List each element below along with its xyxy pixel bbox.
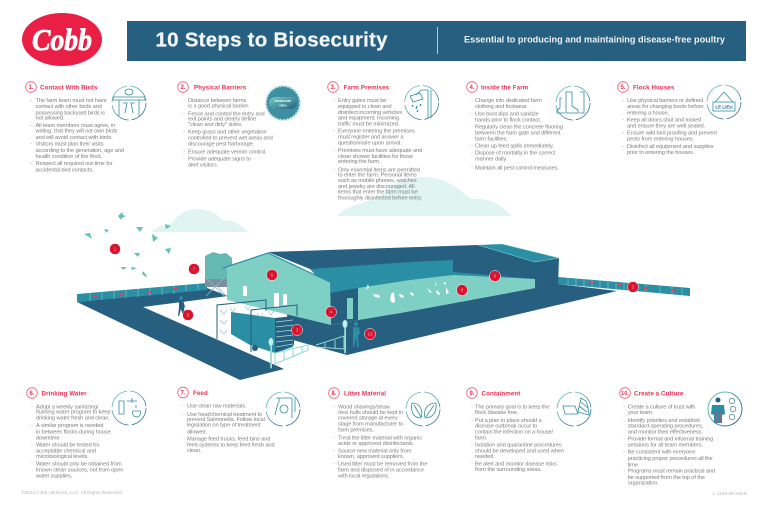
text 5: entering a house. <box>627 110 669 116</box>
text 4: Dispose of mortality in the correct <box>475 151 556 157</box>
heading 9: 9. <box>469 391 475 397</box>
text 10: be supported from the top of the <box>628 475 705 481</box>
text 7: Use heat/chemical treatment to <box>187 412 262 418</box>
text 1: - <box>30 161 32 167</box>
text 9: needed. <box>475 454 495 460</box>
text 4: between the farm gate and different <box>475 131 561 137</box>
heading 4: Inside the Farm <box>481 84 529 91</box>
text 7: allowed. <box>187 430 207 436</box>
panel: 2 physical barriers <box>178 82 300 168</box>
left perimeter fence <box>77 283 207 302</box>
icon: leaves <box>406 392 440 426</box>
text 10: - <box>623 418 625 424</box>
text 4: - <box>471 111 473 117</box>
icon: person with checklist <box>708 392 742 426</box>
text 10: your team. <box>628 410 654 416</box>
icon: biosecurity area sign <box>266 86 300 120</box>
text 1: accidental bird contacts. <box>36 167 94 173</box>
text 5: pests from entering houses. <box>627 137 694 143</box>
icon: person with arms out <box>112 86 146 120</box>
heading 9: Containment <box>482 390 520 397</box>
text 8: farm premises. <box>338 427 374 433</box>
text 1: - <box>30 142 32 148</box>
text 3: to enter the farm. Personal items <box>338 172 417 178</box>
text 10 <box>623 404 715 487</box>
text 1: health condition of the flock. <box>36 154 103 160</box>
copyright footer: ©2024 Cobb-Vantress, LLC. All Rights Reserved <box>21 489 122 495</box>
text 9: flock disease free. <box>475 410 519 416</box>
text 4: hands prior to flock contact. <box>475 117 542 123</box>
text 8: - <box>333 448 335 454</box>
heading 10 <box>620 388 684 398</box>
heading 2 <box>178 82 247 92</box>
text 9: The primary goal is to keep the <box>475 404 549 410</box>
text 1: Visitors must plan their visits <box>36 142 104 148</box>
text 1: - <box>30 98 32 104</box>
text 9: - <box>471 404 473 410</box>
feed truck and disinfecting gantries <box>217 300 297 353</box>
icon: biosecurity area sign: BIOSECURE <box>275 99 291 103</box>
numbered red markers: 1 <box>114 247 117 252</box>
text 3: entering the farm. <box>338 159 381 165</box>
icon: feed system <box>266 392 300 426</box>
text 2: - <box>183 149 185 155</box>
text 8: stage from manufacturer to <box>338 422 403 428</box>
text 10: standard operating procedures, <box>628 423 704 429</box>
numbered red markers: 8 <box>461 288 464 293</box>
flock of wild birds <box>84 212 171 277</box>
text 1 <box>30 98 124 173</box>
text 3: clean shower facilities for those <box>338 154 413 160</box>
text 1: - <box>30 123 32 129</box>
text 3 <box>333 98 423 202</box>
text 10: practicing proper procedures all the <box>628 456 713 462</box>
text 2: is a good physical barrier. <box>188 103 250 109</box>
heading 7: 7. <box>180 390 186 396</box>
text 4: farm facilities. <box>475 137 508 143</box>
text 2: Distance between farms <box>188 98 247 104</box>
gates <box>275 336 344 364</box>
text 9: should be developed and used when <box>475 449 564 455</box>
numbered red markers: 7 <box>193 267 196 272</box>
text 6 <box>31 404 123 479</box>
text 10: organization. <box>628 481 659 487</box>
heading 9 <box>467 388 520 398</box>
icon: hanging sign: LE LIEU <box>715 105 733 110</box>
text 6: microbiological levels. <box>36 454 89 460</box>
heading 4: 4. <box>469 85 475 91</box>
text 4: Change into dedicated farm <box>475 98 542 104</box>
text 6: A similar program is needed <box>36 423 103 429</box>
text 4: Maintain all pest control measures. <box>475 165 559 171</box>
text 6: - <box>31 404 33 410</box>
logo: Cobb: Cobb <box>32 22 92 57</box>
text 3: Entry gates must be <box>338 98 386 104</box>
text 10: - <box>623 404 625 410</box>
text 1: according to the generation, age and <box>36 148 124 154</box>
heading 2: 2. <box>180 85 186 91</box>
text 9: contain the infection on a house/ <box>475 430 553 436</box>
text 8: - <box>333 461 335 467</box>
text 5: areas for changing boots before <box>627 104 704 110</box>
text 3: questionnaire upon arrival. <box>338 141 402 147</box>
illustration: farm scene <box>77 177 690 380</box>
text 5: - <box>622 130 624 136</box>
text 7: - <box>183 404 185 410</box>
text 9: from the surrounding areas. <box>475 467 542 473</box>
text 5: - <box>622 144 624 150</box>
numbered red markers: 2 <box>632 285 635 290</box>
icon: shower <box>405 86 439 120</box>
text 9: disease outbreak occur to <box>475 424 537 430</box>
text 10: and monitor their effectiveness. <box>628 430 703 436</box>
text 8: Used litter must be removed from the <box>338 461 427 467</box>
text 8: known, approved suppliers. <box>338 454 405 460</box>
panel: 6 drinking water <box>27 388 146 479</box>
text 3: - <box>333 167 335 173</box>
text 4: Clean up feed spills immediately. <box>475 144 554 150</box>
text 3: - <box>333 98 335 104</box>
text 3: and equipment. Incoming <box>338 116 399 122</box>
right perimeter fence <box>558 277 690 296</box>
text 8 <box>333 404 427 479</box>
text 10: - <box>623 469 625 475</box>
text 10: Create a culture of trust with <box>628 404 695 410</box>
panel: 10 create a culture <box>620 388 742 487</box>
text 6: - <box>31 461 33 467</box>
heading 10: 10. <box>621 391 629 397</box>
text 8: Wood shavings/straw <box>338 404 391 410</box>
icon: hand and plan <box>557 392 591 426</box>
title: 10 Steps to Biosecurity <box>156 29 388 52</box>
text 6: Adopt a weekly sanitizing/ <box>36 404 99 410</box>
heading 6 <box>27 388 87 398</box>
text 2: - <box>183 111 185 117</box>
text 8: acids or approved disinfectants. <box>338 441 415 447</box>
text 10: - <box>623 450 625 456</box>
worker in yard <box>178 296 185 316</box>
heading 3: 3. <box>330 85 336 91</box>
dark floor and right road <box>285 284 617 355</box>
text 2: Keep grass and other vegetation <box>188 130 266 136</box>
text 3: - <box>333 128 335 134</box>
heading 5: Flock Houses <box>633 84 675 91</box>
heading 8: Litter Material <box>344 390 386 397</box>
heading 7 <box>178 387 208 398</box>
heading 7: Feed <box>193 390 208 397</box>
text 1: and will avoid contact with birds. <box>36 135 113 141</box>
text 7: Use clean raw materials. <box>187 404 247 410</box>
text 2: Provide adequate signs to <box>188 156 251 162</box>
text 2: discourage pest harborage. <box>188 142 255 148</box>
numbered red markers: 6 <box>494 274 497 279</box>
text 10: Programs must remain practical and <box>628 469 715 475</box>
text 6: - <box>31 442 33 448</box>
text 9: farm. <box>475 435 488 441</box>
text 3: items that enter the farm must be <box>338 190 418 196</box>
heading 1: 1. <box>28 85 34 91</box>
panel: 1 contact with birds <box>26 82 146 173</box>
text 2: alert visitors. <box>188 162 219 168</box>
text 2: "clean and dirty" sides. <box>188 122 243 128</box>
heading 8 <box>329 388 386 398</box>
text 6: water supplies. <box>35 473 73 479</box>
left road and yard <box>77 288 284 380</box>
text 8: farm and disposed of in accordance <box>338 467 424 473</box>
text 3: traffic must be minimized. <box>338 122 400 128</box>
document code: L-1125-09-24EN <box>713 491 747 496</box>
heading 1: Contact With Birds <box>40 84 98 91</box>
feed silos <box>205 252 232 296</box>
heading 3: Farm Premises <box>344 84 390 91</box>
text 3: Everyone entering the premises <box>338 128 415 134</box>
numbered red markers: 10 <box>367 332 373 337</box>
text 3: Premises must have adequate and <box>338 148 422 154</box>
numbered red markers <box>110 244 638 340</box>
text 5: prior to entering the houses. <box>627 150 695 156</box>
text 3: and jewelry are discouraged. All <box>338 184 414 190</box>
text 4: clothing and footwear. <box>475 104 528 110</box>
text 3: disinfect incoming vehicles <box>338 110 402 116</box>
text 2: exit points and clearly define <box>188 117 256 123</box>
icon: biosecurity area sign: AREA <box>279 104 287 108</box>
text 3: such as mobile phones, watches <box>338 178 417 184</box>
heading 5 <box>618 82 675 92</box>
text 7: - <box>183 412 185 418</box>
subtitle: Essential to producing and maintaining disease-free poultry <box>464 34 726 46</box>
text 2: controlled to prevent wet areas and <box>188 136 273 142</box>
text 5: Ensure wild bird proofing and prevent <box>627 130 717 136</box>
clouds <box>151 177 511 232</box>
numbered red markers: 3 <box>296 328 299 333</box>
text 6: Water should only be obtained from <box>36 461 122 467</box>
text 6: flushing water program to keep <box>36 410 110 416</box>
text 9: - <box>471 461 473 467</box>
text 9: Put a plan in place should a <box>475 418 542 424</box>
text 7 <box>183 404 274 454</box>
text 4: manner daily. <box>475 157 508 163</box>
text 1: contact with other birds and <box>36 104 102 110</box>
text 1: Respect all required out-time for <box>36 161 113 167</box>
text 8: with local regulations. <box>337 473 390 479</box>
text 5 <box>622 98 717 156</box>
text 3: - <box>333 148 335 154</box>
text 5: Keep all doors shut and locked <box>627 117 701 123</box>
text 9: - <box>471 418 473 424</box>
text 7: feed systems to keep feed fresh and <box>187 442 274 448</box>
text 1: possessing backyard birds is <box>36 110 105 116</box>
text 7: prevent Salmonella. Follow local <box>187 417 265 423</box>
text 4: Use boot dips and sanitize <box>475 111 539 117</box>
text 9 <box>471 404 564 473</box>
text 10: Identify priorities and establish <box>628 418 700 424</box>
panel: 4 inside the farm <box>467 82 590 171</box>
sign posts <box>269 320 347 368</box>
text 4: Regularly clean the concrete flooring <box>475 125 563 131</box>
chicken house <box>223 244 559 325</box>
heading 8: 8. <box>331 391 337 397</box>
text 4 <box>471 98 563 171</box>
heading 1 <box>26 82 98 92</box>
text 2: Ensure adequate vermin control. <box>188 149 267 155</box>
logo: Cobb <box>22 13 102 66</box>
panel: 3 farm premises <box>328 82 439 202</box>
text 5: and ensure they are well sealed. <box>627 124 706 130</box>
text 4: - <box>471 151 473 157</box>
panel: 9 containment <box>467 388 591 473</box>
panel: 7 feed <box>178 387 300 454</box>
text 1: not allowed. <box>36 116 65 122</box>
text 3: equipped to clean and <box>338 104 391 110</box>
heading 2: Physical Barriers <box>194 84 247 91</box>
text 4: - <box>471 125 473 131</box>
text 2: - <box>183 156 185 162</box>
text 10: sessions for all team members. <box>628 442 703 448</box>
icon: water tap and bottle <box>112 391 146 425</box>
text 9: Be alert and monitor disease risks <box>475 461 557 467</box>
text 10: time. <box>628 462 640 468</box>
icon: boots <box>556 86 590 120</box>
text 2: Fence and control the entry and <box>188 111 265 117</box>
header banner <box>127 21 746 61</box>
text 4: - <box>471 165 473 171</box>
text 8: /rice hulls should be kept in <box>338 410 403 416</box>
text 9: - <box>471 443 473 449</box>
text 6: drinking water fresh and clean. <box>36 416 110 422</box>
text 6: acceptable chemical and <box>36 449 96 455</box>
numbered red markers: 4 <box>330 310 333 315</box>
numbered red markers: 9 <box>187 313 190 318</box>
text 5: - <box>622 98 624 104</box>
heading 4 <box>467 82 529 92</box>
text 10: - <box>623 436 625 442</box>
text 10: Provide formal and informal training <box>628 436 713 442</box>
text 7: clean. <box>187 448 202 454</box>
text 5: Use physical barriers or defined <box>627 98 703 104</box>
text 9: Isolation and quarantine procedures <box>475 443 562 449</box>
text 8: covered storage at every <box>338 416 398 422</box>
text 10: Be consistent with everyone <box>628 450 695 456</box>
heading 6: 6. <box>29 391 35 397</box>
text 8: - <box>333 435 335 441</box>
text 5: Disinfect all equipment and supplies <box>627 144 714 150</box>
text 6: in between flocks during house <box>36 430 110 436</box>
heading 3 <box>328 82 390 92</box>
text 7: legislation on type of treatment <box>187 422 261 428</box>
text 8: Source new material only from <box>338 448 412 454</box>
text 4: - <box>471 98 473 104</box>
heading 6: Drinking Water <box>42 390 87 397</box>
text 6: downtime. <box>36 436 61 442</box>
text 3: Only essential items are permitted <box>338 167 420 173</box>
text 3: thoroughly disinfected before entry. <box>338 196 423 202</box>
text 7: - <box>183 436 185 442</box>
text 2: - <box>183 130 185 136</box>
text 7: Manage feed trucks, feed bins and <box>187 436 270 442</box>
text 1: writing, that they will not own birds <box>34 129 118 135</box>
text 3: must register and answer a <box>338 135 404 141</box>
text 6: Water should be tested for <box>36 442 100 448</box>
text 4: - <box>471 144 473 150</box>
text 5: - <box>622 117 624 123</box>
heading 10: Create a Culture <box>634 390 684 397</box>
numbered red markers: 5 <box>271 273 274 278</box>
worker by door <box>353 322 360 347</box>
text 8: - <box>333 404 335 410</box>
text 2 <box>183 98 273 168</box>
text 6: known clean sources, not from open <box>36 467 123 473</box>
text 2: - <box>183 98 185 104</box>
text 6: - <box>31 423 33 429</box>
heading 5: 5. <box>620 85 626 91</box>
panel: 8 litter material <box>329 388 440 479</box>
text 1: All team members must agree, in <box>36 123 115 129</box>
panel: 5 flock houses <box>618 82 741 156</box>
text 8: Treat the litter material with organic <box>338 435 422 441</box>
text 1: The farm team must not have <box>36 98 107 104</box>
